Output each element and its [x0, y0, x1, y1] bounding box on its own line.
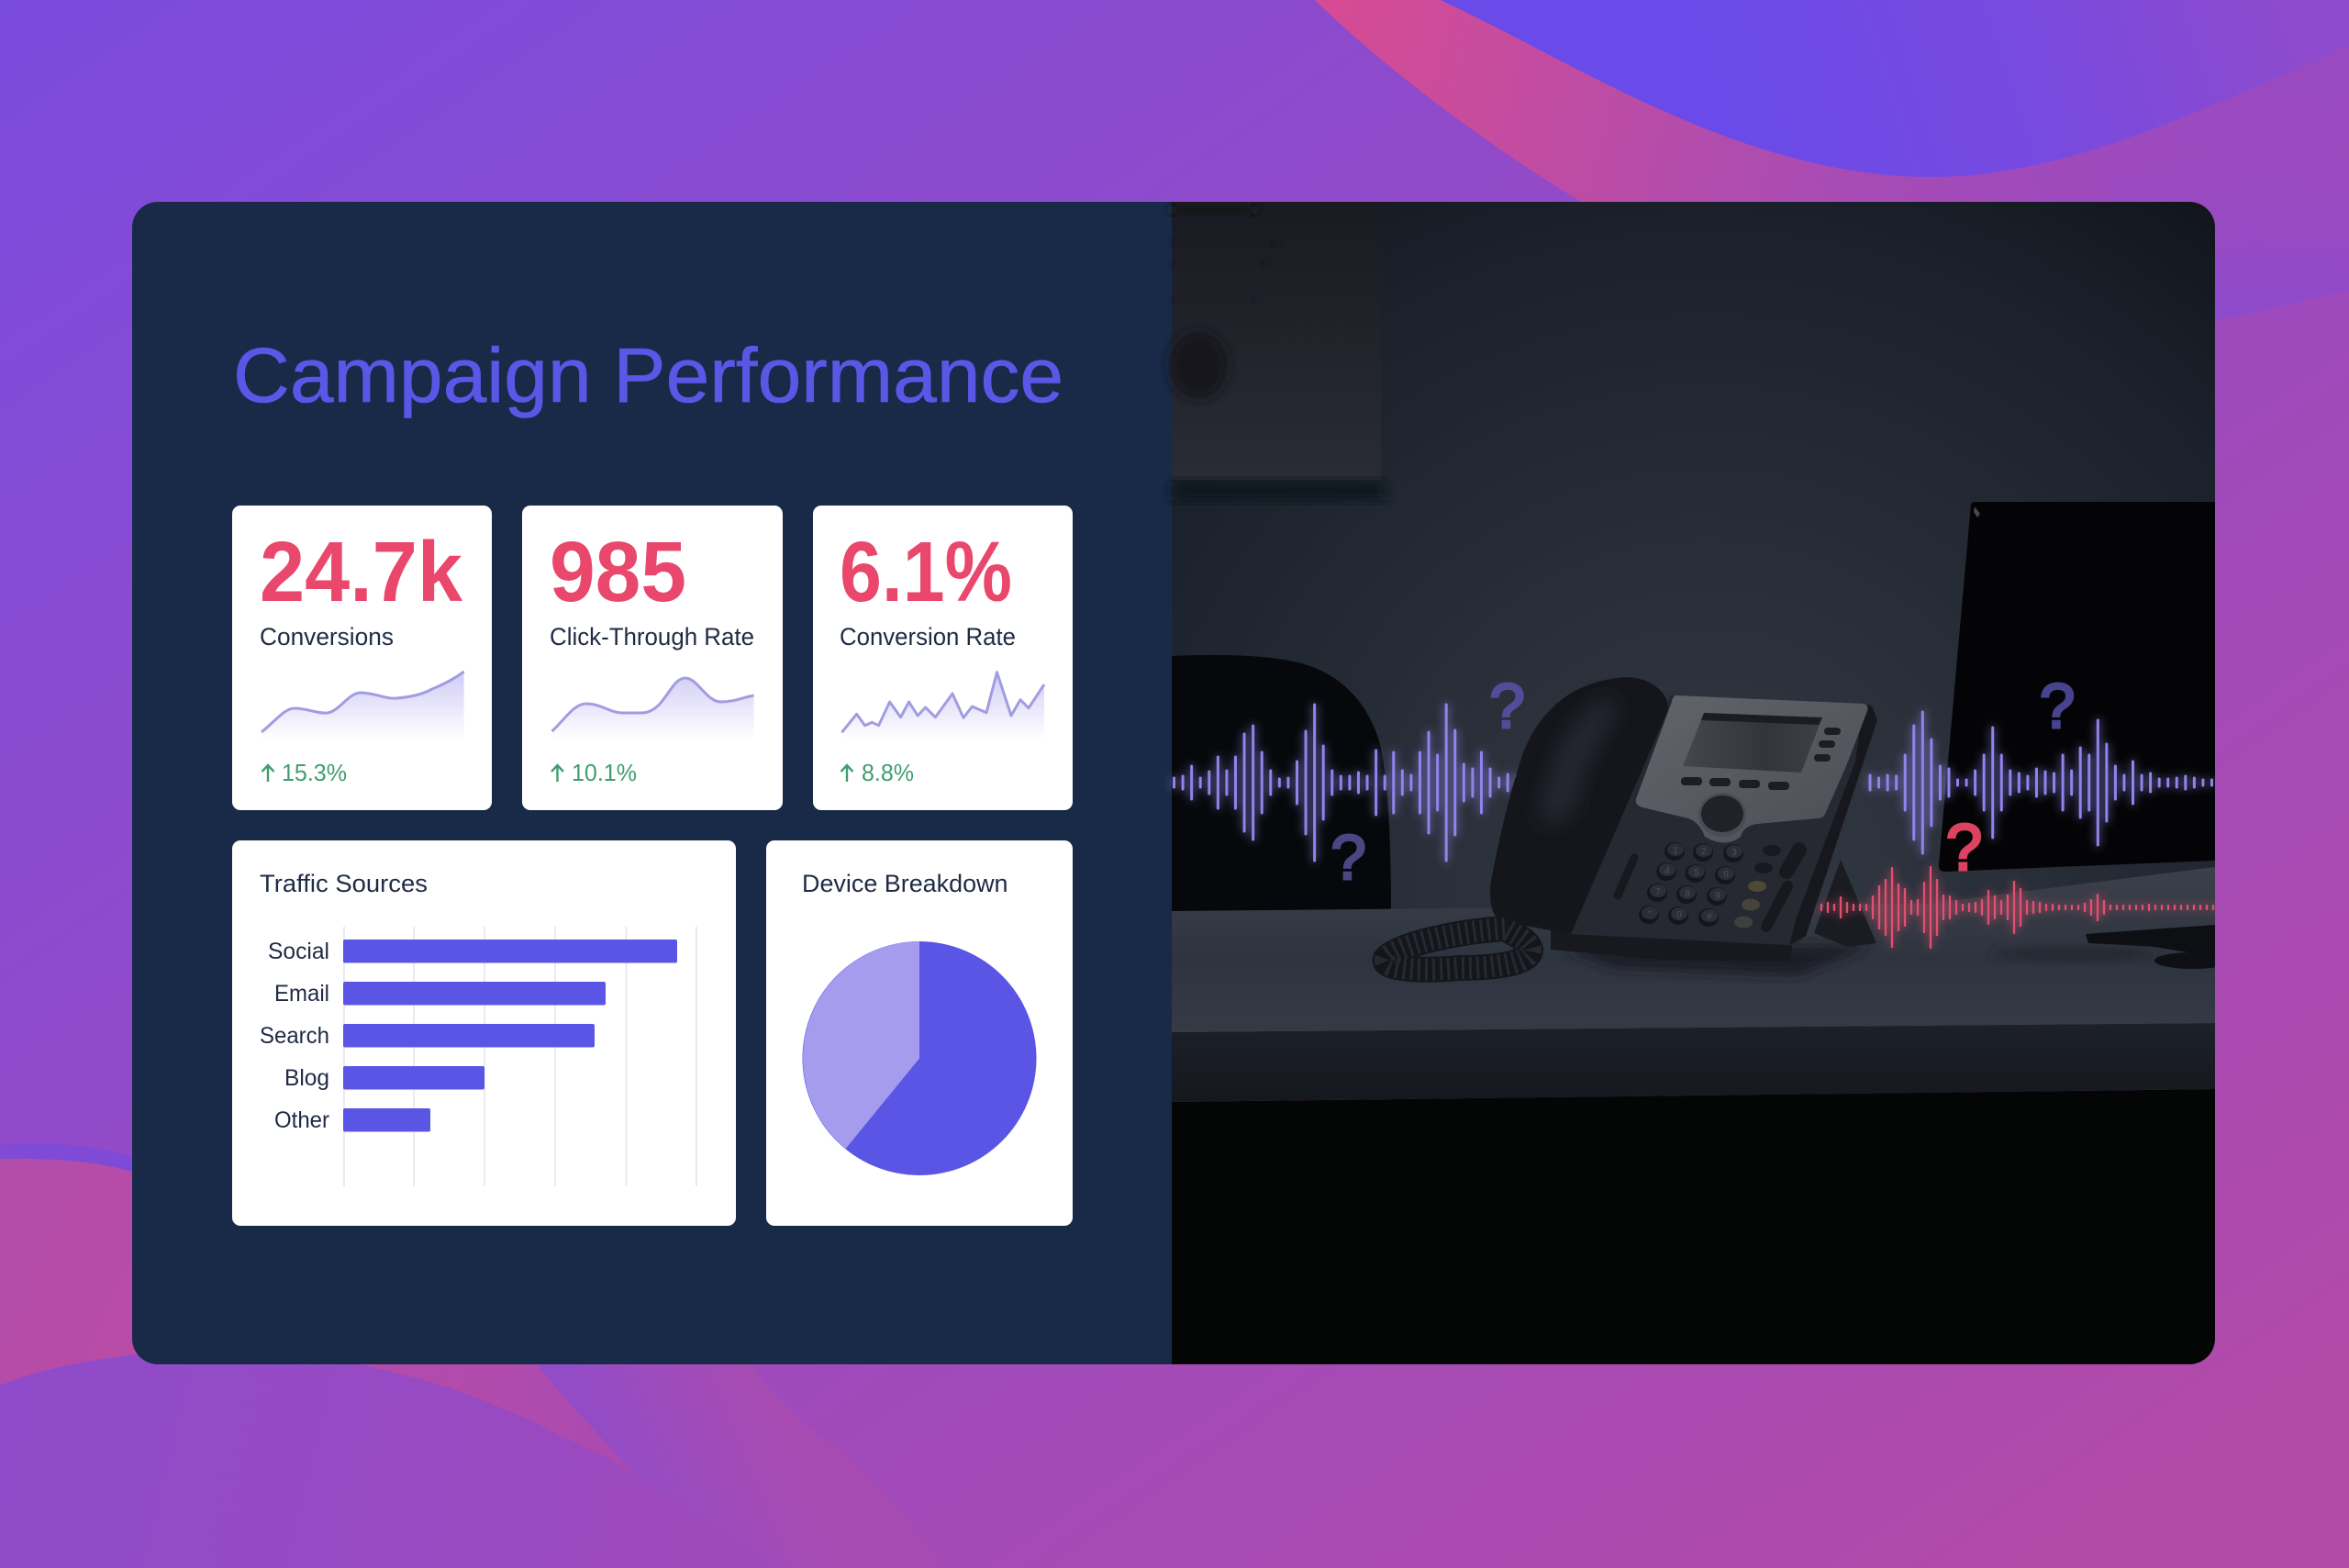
desk top [1172, 867, 2215, 1032]
sparkline [262, 672, 464, 740]
chart title: Traffic Sources [260, 870, 428, 897]
change indicator: 15.3% [282, 759, 347, 786]
pie chart [802, 941, 1037, 1175]
change indicator: 8.8% [862, 759, 914, 786]
value: 24.7k [260, 524, 462, 619]
label: Click-Through Rate [550, 623, 754, 651]
sparkline [552, 678, 754, 740]
chart title: Device Breakdown [802, 870, 1008, 897]
value: 6.1% [840, 524, 1012, 619]
soft keys [1681, 728, 1841, 790]
panel: KPI conversion rate [813, 506, 1073, 810]
phone screen [1683, 713, 1822, 773]
keypad: 8 [1685, 889, 1690, 899]
handset [1490, 677, 1668, 934]
phone shadow [1563, 945, 1872, 975]
bar chart: Search [260, 1023, 329, 1049]
keypad: 4 [1664, 866, 1670, 876]
label: Conversion Rate [840, 623, 1016, 651]
keypad: 9 [1715, 891, 1720, 901]
chair silhouette [1172, 655, 1391, 913]
keypad: * [1648, 909, 1652, 919]
waveform: purple right [1870, 712, 2211, 853]
panel: KPI click-through rate [522, 506, 783, 810]
keypad [1639, 842, 1743, 927]
bar chart: Email [274, 981, 329, 1006]
keypad: # [1707, 912, 1712, 922]
icon: question mark left lower: ? [1330, 822, 1366, 893]
waveform: purple left [1174, 705, 1525, 861]
monitor [1939, 502, 2232, 969]
keypad: 2 [1701, 847, 1707, 857]
keypad: 7 [1655, 887, 1661, 897]
navigation pad [1698, 793, 1746, 837]
change indicator [841, 759, 914, 786]
label: Conversions [260, 623, 394, 651]
bar chart: Blog [284, 1065, 329, 1091]
value: 985 [550, 524, 686, 619]
bar chart: Other [274, 1107, 329, 1133]
keypad: 0 [1676, 910, 1682, 920]
coiled phone cord [1386, 929, 1531, 970]
title: Campaign Performance [233, 332, 1063, 418]
keypad: 1 [1673, 846, 1678, 856]
faceplate [1636, 695, 1868, 842]
bar chart [260, 927, 696, 1186]
change indicator: 10.1% [572, 759, 637, 786]
function buttons [1618, 845, 1799, 929]
keypad: 3 [1731, 848, 1737, 858]
sparkline [841, 673, 1044, 740]
panel: main dashboard card [132, 202, 2232, 1364]
phone [1490, 677, 1877, 962]
keypad: 6 [1723, 870, 1729, 880]
wall frame [1169, 202, 1386, 500]
icon: question mark right upper: ? [2040, 671, 2075, 741]
panel: device breakdown [766, 840, 1073, 1226]
panel: traffic sources [232, 840, 736, 1226]
waveform: red [1821, 867, 2220, 948]
bar chart: Social [268, 939, 329, 964]
panel: KPI conversions [232, 506, 492, 810]
keypad: 5 [1694, 868, 1699, 878]
area under desk [1172, 1089, 2215, 1364]
icon: red question mark: ? [1946, 812, 1982, 884]
panel: left navy background [132, 202, 1172, 1364]
desk front face [1172, 1023, 2215, 1102]
panel: right office photo scene [1169, 202, 2232, 1364]
icon: question mark left upper: ? [1489, 671, 1525, 741]
